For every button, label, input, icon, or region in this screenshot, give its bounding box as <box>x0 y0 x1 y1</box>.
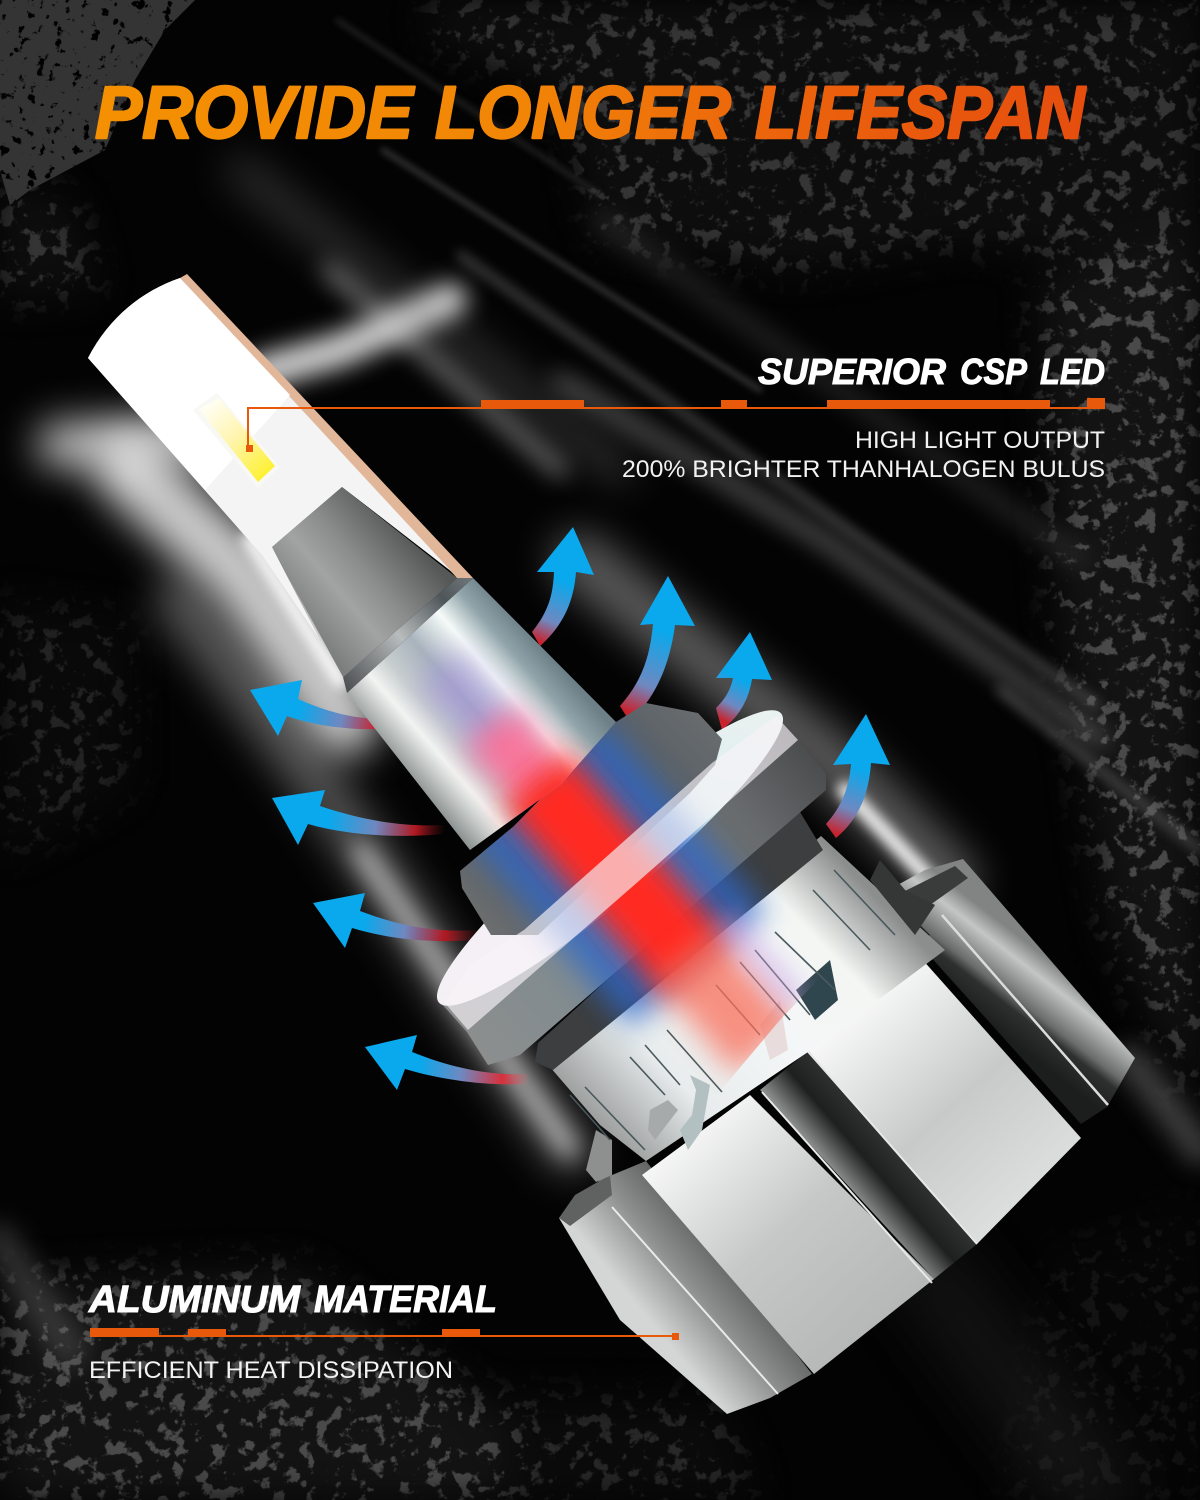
bulb: LED blade <box>88 274 473 640</box>
bulb base: silver fin section <box>550 836 945 1182</box>
callout heading <box>758 351 1105 392</box>
arrow: left 3 <box>313 893 480 948</box>
bulb: barrel band <box>343 578 473 693</box>
bulb base: right cylinder <box>892 859 1135 1124</box>
callout: aluminum material <box>88 1279 679 1384</box>
callout heading: MATERIAL <box>314 1279 497 1321</box>
callout heading: CSP <box>960 351 1028 392</box>
bulb base: left cylinder <box>559 1161 812 1414</box>
bulb: heat band on collar and fins <box>470 719 813 1084</box>
arrow: left 2 <box>272 790 445 845</box>
bulb: barrel <box>347 578 616 850</box>
icon: LED chip <box>193 393 280 488</box>
callout: superior CSP LED <box>246 351 1105 483</box>
bulb <box>88 274 1135 1414</box>
arrow: upper right 4 <box>826 714 890 838</box>
callout text <box>622 427 1105 483</box>
leader line <box>246 398 1105 452</box>
callout heading: ALUMINUM <box>88 1279 301 1321</box>
bulb: tapered neck <box>272 487 457 677</box>
arrow: upper right 2 <box>620 576 695 722</box>
callout text: HIGH LIGHT OUTPUT <box>855 427 1105 454</box>
arrow: left 4 <box>365 1035 530 1090</box>
bulb: dark collar ring <box>535 807 823 1070</box>
callout text: 200% BRIGHTER THANHALOGEN BULUS <box>622 456 1105 483</box>
bulb base: middle panels <box>642 925 1081 1374</box>
title <box>95 71 1086 154</box>
bulb: flange rim highlight <box>444 716 798 1030</box>
arrow: upper right 3 <box>716 632 772 730</box>
callout heading <box>88 1279 497 1321</box>
bulb: heat band on barrel <box>416 641 591 830</box>
title: LONGER <box>435 71 731 154</box>
arrow: left 1 <box>250 680 378 736</box>
leader line <box>90 1328 679 1340</box>
title: PROVIDE <box>95 71 416 154</box>
title: LIFESPAN <box>755 71 1086 154</box>
cooling arrows <box>250 527 890 1090</box>
callout heading: SUPERIOR <box>758 351 946 392</box>
callout text: EFFICIENT HEAT DISSIPATION <box>89 1357 453 1384</box>
arrow: upper right 1 <box>532 527 594 646</box>
callout heading: LED <box>1040 351 1105 392</box>
bulb: hex collar <box>460 703 722 935</box>
bulb: flange <box>413 683 826 1065</box>
